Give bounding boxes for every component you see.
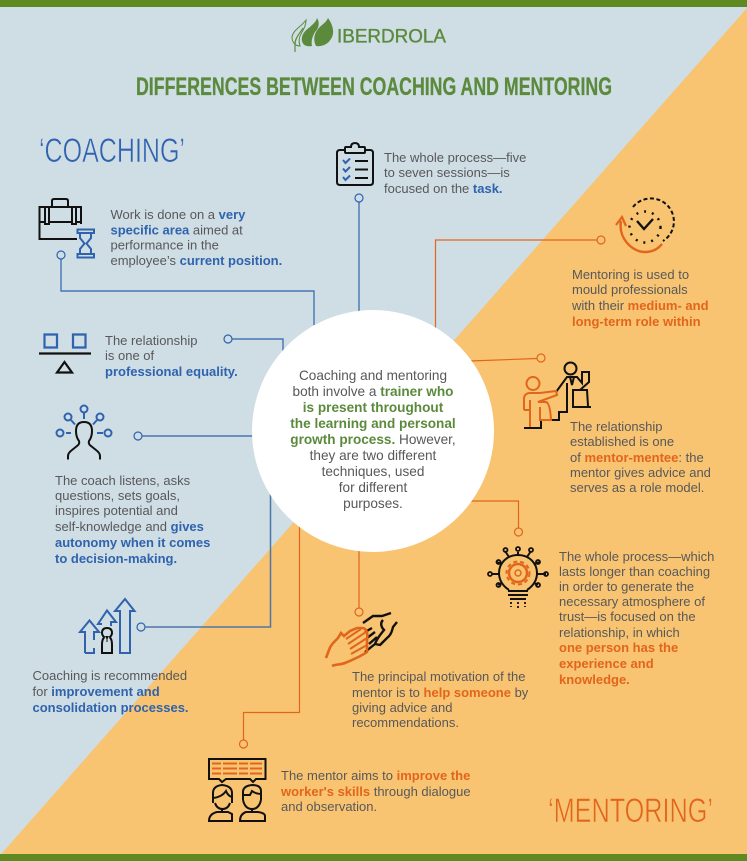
item: professional equality: professional equality. (105, 364, 238, 379)
item: medium- and long-term role: with their medium- and (571, 298, 709, 313)
item: help someone: recommendations. (352, 715, 459, 730)
central circle: both involve a trainer who (293, 384, 453, 399)
item: task: focused on the task. (384, 181, 503, 196)
item: task (337, 143, 526, 196)
item: coach listens: questions, sets goals, (55, 488, 180, 503)
text: The whole process—which (559, 549, 714, 564)
item: experience and knowledge: necessary atmosphere of (559, 594, 705, 609)
item: experience and knowledge: relationship, in which (559, 625, 680, 640)
icon: light bulb with gear (488, 547, 548, 609)
item: help someone (326, 613, 529, 730)
item: specific area (40, 199, 282, 268)
icon: arrows and person (80, 599, 134, 653)
item: improvement: consolidation processes. (32, 700, 189, 715)
item: professional equality (39, 333, 238, 379)
text: Coaching is recommended (32, 668, 187, 683)
central circle: Coaching and mentoring (299, 368, 447, 383)
item: improve skills (209, 759, 471, 821)
item: mentor-mentee (524, 362, 711, 495)
logo: Iberdrola (292, 18, 446, 52)
text: Work is done on a very (110, 207, 246, 222)
heading: coaching: ‘COACHING’ (39, 132, 185, 170)
item: experience and knowledge: knowledge. (559, 672, 630, 687)
item: mentor-mentee: of mentor-mentee: the (570, 450, 704, 465)
item: help someone: mentor is to help someone by (352, 685, 529, 700)
text: The coach listens, asks (55, 473, 191, 488)
central circle (252, 310, 494, 552)
central circle: for different (339, 480, 407, 495)
central circle: techniques, used (322, 464, 424, 479)
central circle: purposes. (343, 496, 403, 511)
item: coach listens: inspires potential and (55, 503, 178, 518)
central circle: is present throughout (303, 400, 444, 415)
icon: clock (616, 198, 674, 252)
icon: person with nodes (56, 406, 112, 460)
item: task: to seven sessions—is (384, 165, 510, 180)
icon: balance (39, 334, 91, 372)
item: coach listens: autonomy when it comes (55, 535, 210, 550)
text: The relationship (570, 419, 662, 434)
text: The principal motivation of the (352, 669, 525, 684)
item: experience and knowledge: experience and (559, 656, 654, 671)
logo: Iberdrola: IBERDROLA (337, 26, 446, 48)
central circle: the learning and personal (290, 416, 456, 431)
icon: briefcase and hourglass (40, 199, 94, 258)
text: Mentoring is used to (572, 267, 689, 282)
item: coach listens: self-knowledge and gives (55, 519, 204, 534)
item: improvement: for improvement and (32, 684, 160, 699)
text: The mentor aims to improve the (281, 768, 470, 783)
item: mentor-mentee: serves as a role model. (570, 480, 704, 495)
item: medium- and long-term role (571, 198, 709, 329)
item: mentor-mentee: established is one (570, 434, 674, 449)
item: experience and knowledge: one person has the (559, 640, 678, 655)
connector lines: mentoring (240, 236, 605, 748)
icon: clipboard checklist (337, 143, 373, 185)
item: specific area: specific area aimed at (110, 222, 243, 238)
item: specific area: performance in the (110, 238, 219, 252)
item: mentor-mentee: mentor gives advice and (570, 465, 711, 480)
item: medium- and long-term role: long-term role within (572, 314, 701, 329)
item: improvement (32, 599, 189, 715)
item: experience and knowledge: lasts longer than coaching (559, 564, 710, 579)
central circle: they are two different (310, 448, 437, 463)
item: professional equality: is one of (105, 348, 155, 363)
text: The whole process—five (384, 150, 526, 165)
icon: mentor on stairs (524, 362, 591, 428)
item: improve skills: worker's skills through dialogue (280, 784, 471, 799)
item: improve skills: and observation. (281, 799, 377, 814)
central circle: growth process. However, (290, 432, 456, 447)
icon: handshake (326, 613, 397, 666)
item: experience and knowledge (488, 547, 714, 687)
icon: two people with speech bubble (209, 759, 266, 821)
item: medium- and long-term role: mould professionals (572, 282, 688, 297)
item: specific area: employee’s current position. (110, 253, 282, 268)
item: experience and knowledge: in order to generate the (559, 579, 694, 594)
text: The relationship (105, 333, 198, 348)
item: help someone: giving advice and (352, 700, 452, 715)
connector lines: coaching (57, 194, 363, 631)
item: coach listens (55, 406, 210, 566)
item: coach listens: to decision-making. (55, 551, 177, 566)
item: experience and knowledge: trust—is focused on the (559, 609, 696, 624)
